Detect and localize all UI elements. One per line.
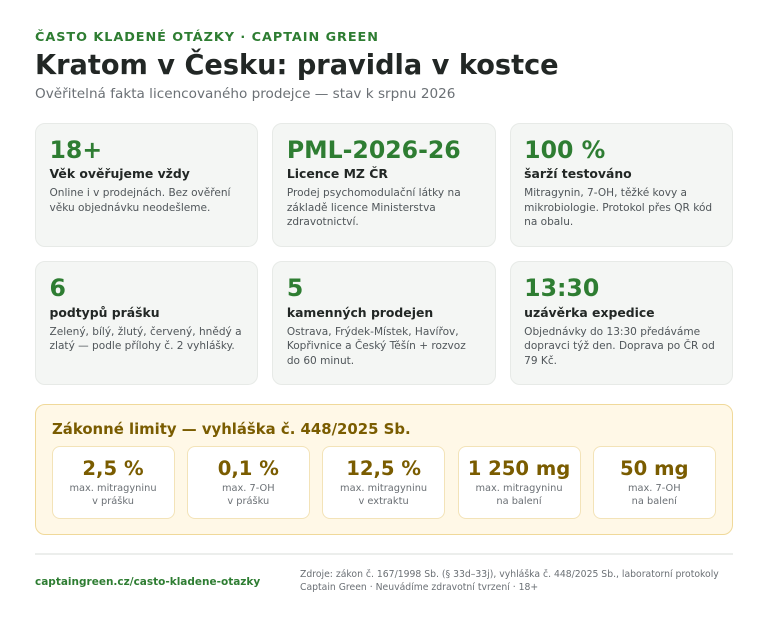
caption: v prášku xyxy=(227,496,269,507)
caption xyxy=(475,483,563,507)
description: age check xyxy=(50,187,231,214)
description: age check: Online i v prodejnách. Bez ověření xyxy=(50,187,230,199)
caption xyxy=(222,483,275,507)
stat: 6: 6 xyxy=(50,274,66,302)
panel: legal limits xyxy=(35,404,733,535)
caption: v prášku xyxy=(92,496,134,507)
description: licence: Prodej psychomodulační látky na xyxy=(287,187,461,199)
caption xyxy=(340,483,427,507)
label: age check: Věk ověřujeme vždy xyxy=(50,166,190,181)
description: licence: zdravotnictví. xyxy=(287,216,359,228)
caption: na balení xyxy=(496,496,542,507)
description: batch testing: na obalu. xyxy=(524,216,573,228)
limit: mitragynine in powder xyxy=(52,446,174,518)
stat: 100 %: 100 % xyxy=(524,136,605,164)
description: stores: Kopřivnice a Český Těšín + rozvoz xyxy=(287,340,466,352)
description: batch testing: mikrobiologie. Protokol přes QR kód xyxy=(524,202,712,214)
caption: max. mitragyninu xyxy=(340,483,427,494)
description: powder subtypes: zlatý — podle přílohy č. 2 vyhlášky. xyxy=(50,340,235,352)
caption: max. mitragyninu xyxy=(475,483,563,494)
stat: 13:30: 13:30 xyxy=(524,274,599,302)
value: 12,5 % xyxy=(346,456,421,480)
limit: mitragynine per pack xyxy=(458,446,580,518)
panel: licence xyxy=(272,123,496,247)
description: age check: věku objednávku neodešleme. xyxy=(50,202,210,214)
caption: max. 7-OH xyxy=(222,483,275,494)
title: Kratom v Česku: pravidla v kostce xyxy=(35,50,559,80)
footer sources: Zdroje: zákon č. 167/1998 Sb. (§ 33d–33j), vyhláška č. 448/2025 Sb., laboratorní protokoly xyxy=(300,569,719,580)
caption xyxy=(628,483,681,507)
description: dispatch cutoff xyxy=(524,326,715,367)
description: batch testing xyxy=(524,187,712,228)
panel: batch testing xyxy=(510,123,733,247)
description: dispatch cutoff: 79 Kč. xyxy=(524,355,557,367)
panel: age check xyxy=(35,123,258,247)
stat: 5: 5 xyxy=(287,274,303,302)
description: stores xyxy=(287,326,466,367)
description: powder subtypes: Zelený, bílý, žlutý, červený, hnědý a xyxy=(50,326,242,338)
description: licence xyxy=(287,187,461,228)
limit: 7-OH per pack xyxy=(593,446,716,518)
value: 0,1 % xyxy=(218,456,279,480)
limit: mitragynine in extract xyxy=(322,446,445,518)
caption xyxy=(69,483,157,507)
label: batch testing: šarží testováno xyxy=(524,166,632,181)
stat: licence number: PML-2026-26 xyxy=(287,136,461,164)
description: dispatch cutoff: dopravci týž den. Doprava po ČR od xyxy=(524,340,715,352)
value: 50 mg xyxy=(620,456,689,480)
value: 2,5 % xyxy=(82,456,144,480)
label: powder subtypes: podtypů prášku xyxy=(50,305,160,320)
subtitle: Ověřitelná fakta licencovaného prodejce — stav k srpnu 2026 xyxy=(35,86,455,102)
eyebrow: ČASTO KLADENÉ OTÁZKY · CAPTAIN GREEN xyxy=(35,30,379,44)
label: stores: kamenných prodejen xyxy=(287,305,433,320)
caption: v extraktu xyxy=(358,496,409,507)
description: stores: Ostrava, Frýdek-Místek, Havířov, xyxy=(287,326,459,338)
limit: 7-OH in powder xyxy=(187,446,310,518)
footer sources: Captain Green · Neuvádíme zdravotní tvrzení · 18+ xyxy=(300,582,538,593)
panel: stores xyxy=(272,261,496,385)
panel: dispatch cutoff xyxy=(510,261,733,385)
footer sources xyxy=(300,569,719,593)
caption: max. 7-OH xyxy=(628,483,681,494)
caption: max. mitragyninu xyxy=(69,483,157,494)
heading: legal limits: Zákonné limity — vyhláška č. 448/2025 Sb. xyxy=(52,420,411,438)
stat: 18+: 18+ xyxy=(50,136,102,164)
panel: powder subtypes xyxy=(35,261,258,385)
value: 1 250 mg xyxy=(468,456,570,480)
label: dispatch cutoff: uzávěrka expedice xyxy=(524,305,655,320)
description: powder subtypes xyxy=(50,326,242,352)
caption: na balení xyxy=(632,496,677,507)
description: licence: základě licence Ministerstva xyxy=(287,202,436,214)
footer link: captaingreen.cz/casto-kladene-otazky xyxy=(35,576,260,588)
description: dispatch cutoff: Objednávky do 13:30 předáváme xyxy=(524,326,700,338)
description: batch testing: Mitragynin, 7-OH, těžké kovy a xyxy=(524,187,687,199)
description: stores: do 60 minut. xyxy=(287,355,354,367)
label: licence: Licence MZ ČR xyxy=(287,166,388,181)
